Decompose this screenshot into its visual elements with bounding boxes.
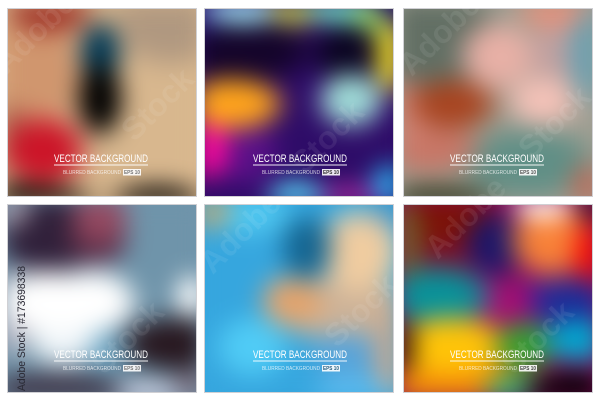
panel caption bbox=[54, 153, 148, 176]
panel caption: VECTOR BACKGROUND bbox=[54, 349, 148, 361]
panel caption: EPS 10 bbox=[323, 366, 339, 372]
panel: sage and coral blurred background bbox=[403, 8, 593, 197]
watermark: Adobe Stock: Adobe bbox=[192, 184, 288, 280]
panel caption: EPS 10 bbox=[520, 366, 536, 372]
panel caption: BLURRED BACKGROUND bbox=[459, 366, 517, 372]
panel: rainbow blurred background bbox=[403, 204, 593, 393]
watermark: Adobe Stock: Stock bbox=[511, 79, 598, 166]
panel caption: VECTOR BACKGROUND bbox=[253, 153, 347, 165]
watermark: Adobe Stock: Stock bbox=[284, 94, 371, 181]
panel caption: EPS 10 bbox=[520, 170, 536, 176]
panel caption: BLURRED BACKGROUND bbox=[262, 170, 320, 176]
panel caption: BLURRED BACKGROUND bbox=[63, 170, 121, 176]
panel caption bbox=[253, 349, 347, 372]
panel: warm tan blurred background bbox=[7, 8, 197, 197]
panel caption: BLURRED BACKGROUND bbox=[63, 366, 121, 372]
watermark: Adobe Stock: Stock bbox=[317, 267, 404, 354]
panel: plum and white blurred background bbox=[7, 204, 197, 393]
panel caption: VECTOR BACKGROUND bbox=[450, 349, 544, 361]
watermark: Adobe Stock: Stock bbox=[114, 61, 201, 148]
panel caption: VECTOR BACKGROUND bbox=[54, 153, 148, 165]
watermark: Adobe Stock: Adobe bbox=[417, 169, 513, 265]
panel caption: EPS 10 bbox=[124, 366, 140, 372]
panel: violet neon blurred background bbox=[204, 8, 394, 197]
panel caption: BLURRED BACKGROUND bbox=[262, 366, 320, 372]
panel caption bbox=[450, 349, 544, 372]
panel caption: EPS 10 bbox=[124, 170, 140, 176]
panel caption bbox=[253, 153, 347, 176]
panel caption bbox=[450, 153, 544, 176]
panel caption: EPS 10 bbox=[323, 170, 339, 176]
stock id side label: Adobe Stock | #173698338 bbox=[16, 266, 28, 391]
watermark: Adobe Stock: Stock bbox=[494, 294, 581, 381]
panel caption: VECTOR BACKGROUND bbox=[450, 153, 544, 165]
watermark: Adobe Stock: Stock bbox=[84, 294, 171, 381]
panel: sky blue and peach blurred background bbox=[204, 204, 394, 393]
panel caption bbox=[16, 266, 148, 391]
panel caption: BLURRED BACKGROUND bbox=[459, 170, 517, 176]
panel caption: VECTOR BACKGROUND bbox=[253, 349, 347, 361]
